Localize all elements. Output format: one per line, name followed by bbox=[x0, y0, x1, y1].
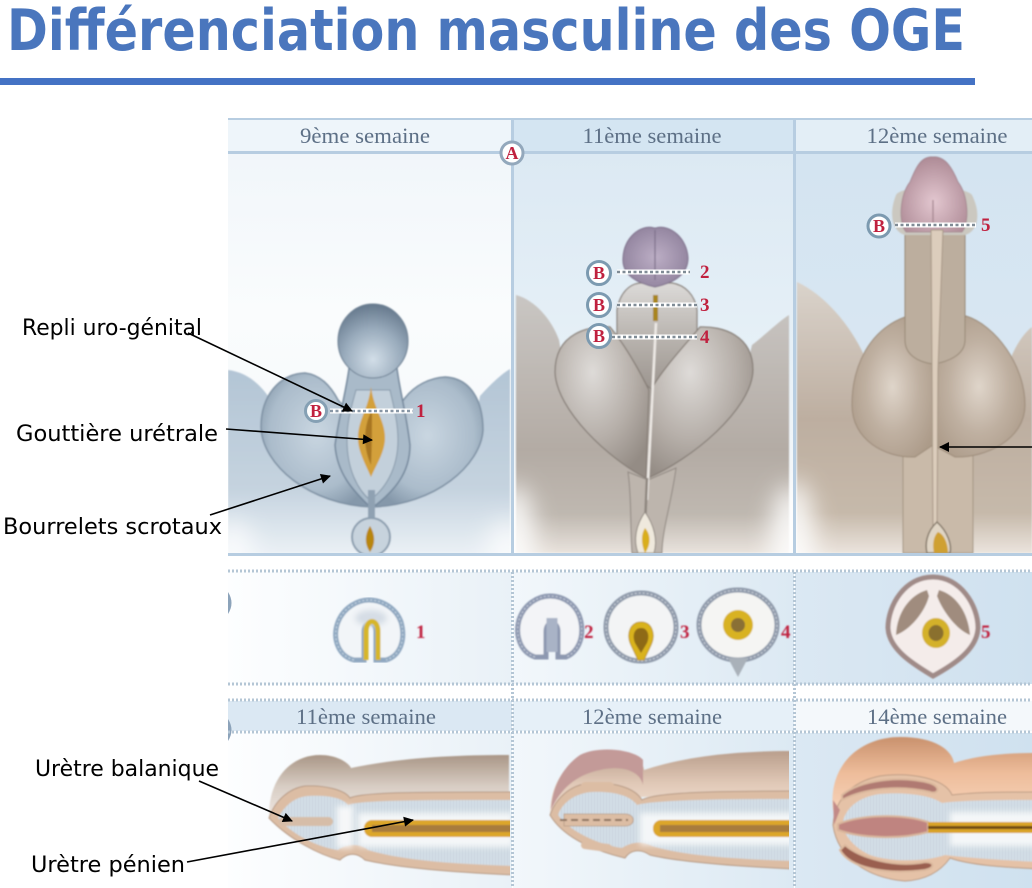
markers B2 B3 B4: 3 bbox=[700, 295, 710, 316]
section 2 bbox=[518, 596, 594, 657]
section 3: 3 bbox=[680, 622, 690, 643]
arrow: Urètre balanique bbox=[199, 781, 292, 821]
panel: 11ème semaine bbox=[514, 120, 793, 553]
marker B1 bbox=[306, 400, 426, 422]
arrow: raphé bbox=[940, 446, 1032, 448]
section 1: 1 bbox=[416, 622, 426, 643]
section 5 bbox=[888, 577, 990, 676]
header: 9ème semaine: 9ème semaine bbox=[300, 123, 430, 148]
label: Gouttière urétrale: Gouttière urétrale bbox=[16, 422, 218, 447]
label: Urètre balanique: Urètre balanique bbox=[35, 757, 219, 782]
marker B5 bbox=[868, 215, 990, 237]
illustration: coupe 14 semaines bbox=[832, 737, 1032, 881]
header: 14ème semaine bbox=[795, 701, 1032, 731]
markers B2 B3 B4: B bbox=[593, 263, 605, 283]
marker A: A bbox=[506, 143, 518, 163]
arrow: Bourrelets scrotaux bbox=[210, 476, 330, 515]
marker B5: B bbox=[873, 216, 885, 236]
illustration: coupe 12 semaines bbox=[550, 750, 803, 869]
header: 11ème semaine bbox=[228, 701, 512, 731]
marker A bbox=[501, 142, 523, 164]
section 4: 4 bbox=[781, 622, 791, 643]
markers B2 B3 B4 bbox=[588, 262, 710, 348]
header: 14ème semaine: 14ème semaine bbox=[867, 704, 1007, 729]
marker B1: 1 bbox=[416, 401, 426, 422]
label: Repli uro-génital: Repli uro-génital bbox=[22, 316, 202, 341]
arrow: Repli uro-génital bbox=[188, 333, 352, 411]
marker stub bbox=[228, 592, 232, 614]
header: 11ème semaine: 11ème semaine bbox=[582, 123, 722, 148]
dotted separators bbox=[228, 571, 1032, 888]
markers B2 B3 B4: 4 bbox=[700, 327, 710, 348]
panel: 12ème semaine bbox=[796, 120, 1032, 553]
section 5: 5 bbox=[981, 622, 990, 643]
panel: 9ème semaine bbox=[228, 120, 511, 553]
header: 12ème semaine: 12ème semaine bbox=[582, 704, 722, 729]
section 2: 2 bbox=[584, 622, 594, 643]
arrow: Gouttière urétrale bbox=[226, 429, 372, 440]
illustration: stade 9 semaines bbox=[228, 302, 511, 553]
header: 12ème semaine bbox=[795, 120, 1032, 151]
markers B2 B3 B4: B bbox=[593, 326, 605, 346]
marker B5: 5 bbox=[981, 215, 990, 236]
arrow: Urètre pénien bbox=[187, 820, 413, 862]
section 1 bbox=[336, 600, 426, 660]
header: 12ème semaine: 12ème semaine bbox=[866, 123, 1008, 148]
section 4 bbox=[699, 590, 791, 677]
panel frame lines bbox=[228, 118, 1032, 556]
label: Bourrelets scrotaux: Bourrelets scrotaux bbox=[3, 515, 222, 540]
title underline bbox=[0, 78, 975, 85]
illustration: stade 12 semaines bbox=[796, 156, 1032, 553]
markers B2 B3 B4: 2 bbox=[700, 262, 710, 283]
illustration: stade 11 semaines bbox=[515, 226, 790, 553]
marker stub bbox=[228, 719, 232, 741]
header: 11ème semaine: 11ème semaine bbox=[296, 704, 436, 729]
section 3 bbox=[606, 593, 690, 661]
header: 12ème semaine bbox=[513, 701, 794, 731]
illustration: coupe 11 semaines bbox=[269, 755, 524, 875]
header: 9ème semaine bbox=[228, 120, 511, 151]
markers B2 B3 B4: B bbox=[593, 295, 605, 315]
panel: coupes transversales bbox=[228, 572, 1032, 684]
label: Urètre pénien: Urètre pénien bbox=[31, 853, 185, 878]
panel: coupes longitudinales bbox=[228, 701, 1032, 888]
header: 11ème semaine bbox=[514, 120, 793, 151]
marker B1: B bbox=[310, 401, 322, 421]
